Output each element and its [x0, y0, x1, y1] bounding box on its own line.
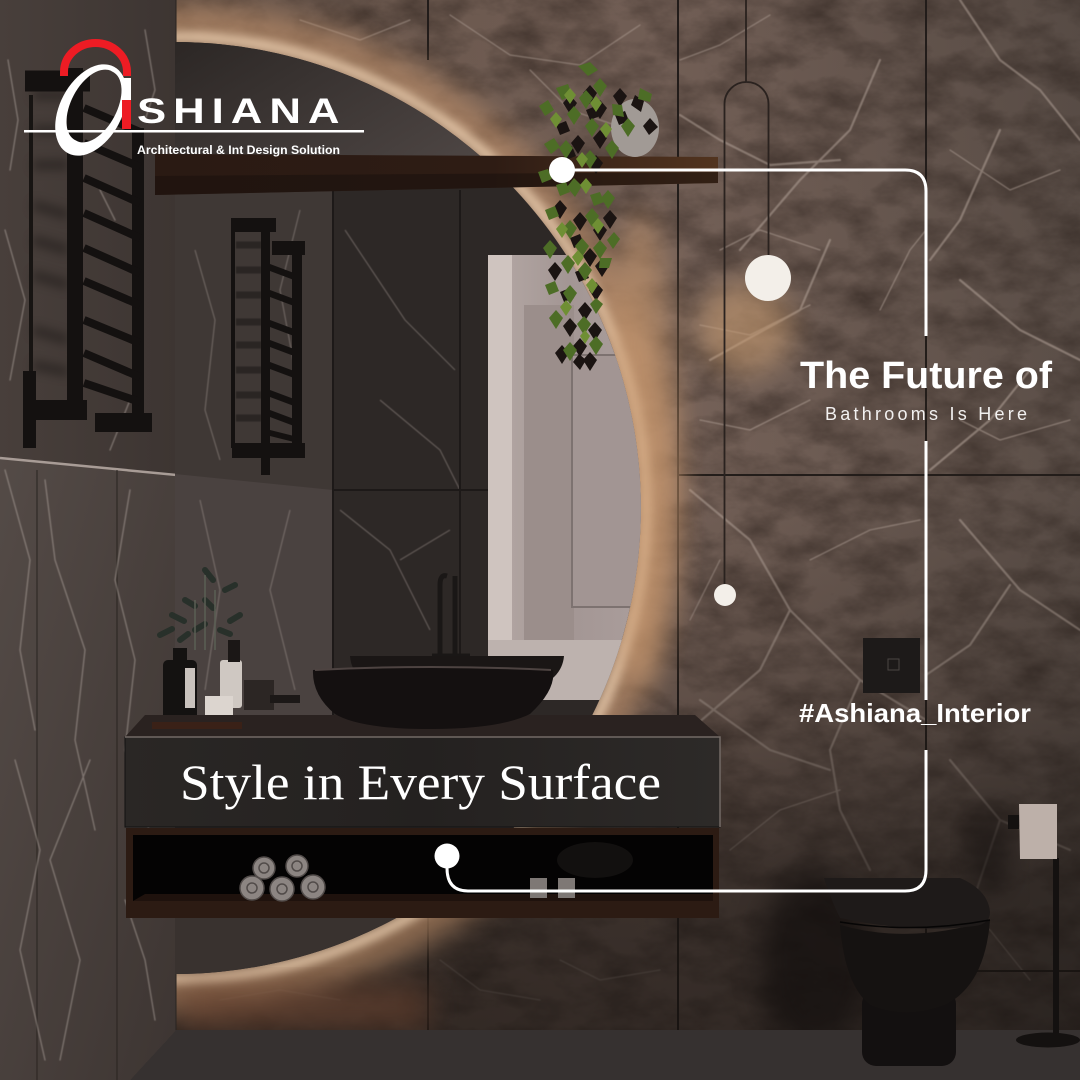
soft shadow of paper holder	[968, 805, 1012, 895]
rack shadow on wall	[33, 95, 68, 372]
logo red stem	[122, 100, 131, 129]
reflected upper wall	[175, 42, 480, 156]
heading line: The Future of	[800, 355, 1052, 397]
logo red arch	[64, 43, 127, 76]
counter-top accessories	[160, 570, 300, 722]
vanity counter top	[125, 715, 720, 737]
reflected towel rack in mirror	[231, 218, 305, 475]
faucet	[432, 576, 470, 660]
logo white ring	[55, 64, 127, 156]
logo wordmark: SHIANA	[137, 92, 339, 131]
sub-heading line: Bathrooms Is Here	[825, 404, 1027, 424]
heading block: The Future of Bathrooms Is Here	[800, 355, 1052, 424]
vertical and horizontal tile joints	[428, 0, 1080, 1030]
reflected basin	[350, 656, 564, 690]
marble veins on right wall	[220, 0, 1080, 1000]
rolled towels	[240, 855, 325, 901]
wall shelf	[155, 154, 718, 195]
flush plate	[863, 638, 920, 693]
hanging plant with pot	[538, 62, 659, 371]
lit wall strip below mirror	[178, 985, 428, 1030]
start dot	[549, 157, 575, 183]
open vanity shelf	[126, 828, 719, 918]
reflected tile lines	[333, 190, 488, 720]
heated towel rack, left wall	[23, 68, 152, 448]
reflected side wall	[175, 190, 333, 490]
dried flowers in shelf	[557, 842, 633, 878]
heading: Style in Every Surface: Style in Every Surface	[180, 754, 661, 810]
wall-hung basin	[313, 667, 553, 729]
large globe	[745, 255, 791, 301]
small globe	[714, 584, 736, 606]
logo tagline: Architectural & Int Design Solution	[137, 145, 340, 157]
end dot	[434, 844, 460, 868]
counter tray	[152, 722, 242, 729]
connector frame line with gaps	[434, 157, 926, 891]
hashtag: #Ashiana_Interior	[799, 698, 1031, 728]
left side wall	[0, 0, 333, 1080]
vanity drawer panel	[125, 737, 720, 827]
logo rule	[24, 130, 364, 132]
reflected veins	[195, 210, 460, 690]
small cups	[530, 878, 575, 898]
glow: LED halo around round mirror	[176, 0, 698, 1026]
logo: Ashiana	[24, 43, 364, 157]
logo white stem top	[122, 78, 131, 102]
toilet paper holder	[1008, 804, 1080, 1048]
soft shadow behind toilet	[760, 870, 870, 1050]
toilet	[824, 878, 990, 1066]
pendant lamp with two globes	[714, 0, 791, 606]
round mirror with reflection	[175, 42, 648, 982]
decorative plant	[160, 570, 240, 640]
reflected door	[512, 255, 641, 700]
floor	[130, 1030, 1080, 1080]
warm light pool under large globe	[697, 282, 793, 374]
